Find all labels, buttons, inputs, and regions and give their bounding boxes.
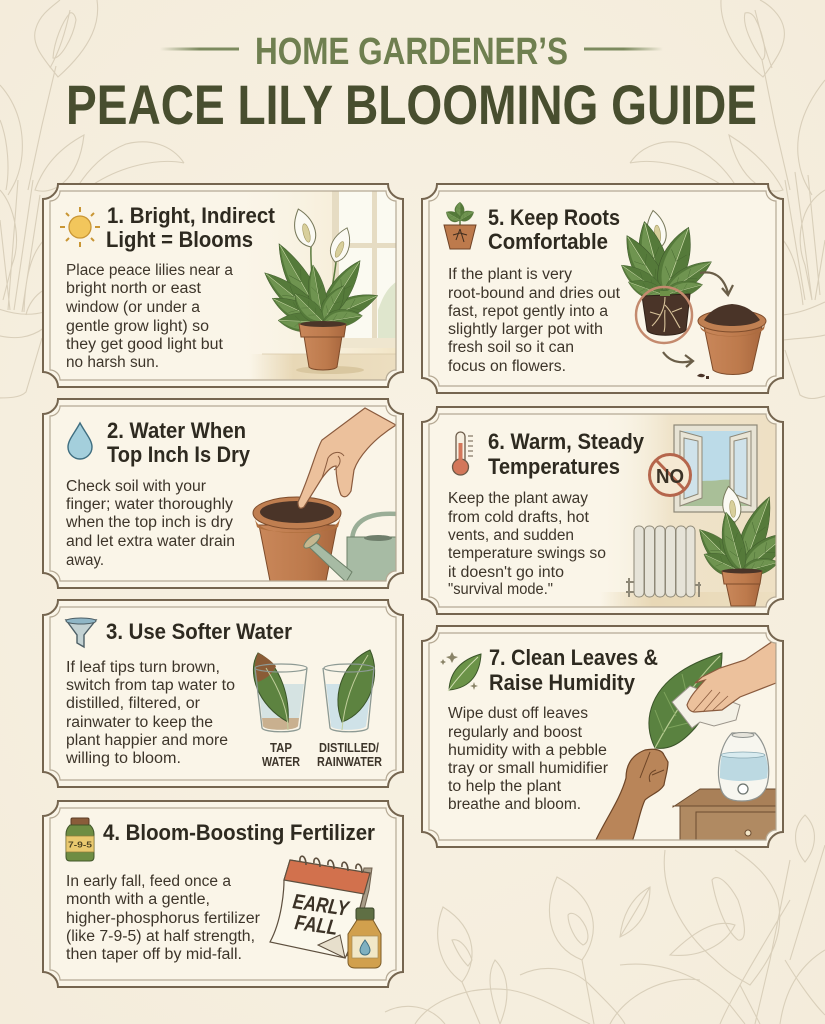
icon: fertilizer bottle: 7-9-5 xyxy=(68,840,92,850)
soil crumbs xyxy=(697,374,709,379)
body text 6: vents, and sudden xyxy=(448,527,574,544)
body text 6: it doesn't go into xyxy=(448,564,564,581)
icon: fertilizer bottle xyxy=(66,818,94,861)
illustration: early fall calendar: FALL xyxy=(293,911,339,940)
icon: funnel xyxy=(66,618,96,647)
body text 3: plant happier and more xyxy=(66,732,228,749)
heading 1: 1. Bright, Indirect xyxy=(107,203,276,228)
illustration: distilled water glass xyxy=(323,650,375,732)
body text 2: when the top inch is dry xyxy=(65,514,233,531)
body text 2: Check soil with your xyxy=(66,478,206,495)
heading 5: 5. Keep Roots xyxy=(488,205,620,230)
panel 5: keep roots comfortable xyxy=(422,184,783,393)
body text 5: fresh soil so it can xyxy=(448,339,574,356)
body text 7 xyxy=(448,705,608,813)
heading 7 xyxy=(489,645,658,695)
body text 1: no harsh sun. xyxy=(66,354,159,371)
title: HOME GARDENER’S xyxy=(255,31,568,73)
panel 1: bright indirect light xyxy=(43,184,403,387)
body text 6 xyxy=(448,490,606,598)
body text 7: regularly and boost xyxy=(448,724,583,741)
body text 6: "survival mode." xyxy=(448,581,553,598)
heading 2: Top Inch Is Dry xyxy=(107,442,251,467)
body text 7: humidity with a pebble xyxy=(448,742,607,759)
icon: water drop xyxy=(68,423,92,459)
body text 2: and let extra water drain xyxy=(66,533,235,550)
no sign xyxy=(650,454,690,496)
body text 5: If the plant is very xyxy=(448,266,572,283)
heading 7: 7. Clean Leaves & xyxy=(489,645,658,670)
body text 7: tray or small humidifier xyxy=(448,760,608,777)
panel 2: water when top inch is dry xyxy=(43,399,403,588)
body text 4 xyxy=(66,873,260,963)
body text 3 xyxy=(65,659,235,767)
body text 4: higher-phosphorus fertilizer xyxy=(66,910,260,927)
body text 7: breathe and bloom. xyxy=(448,796,581,813)
glass labels: TAP xyxy=(270,741,292,755)
icon: potted seedling with roots xyxy=(443,202,476,249)
body text 4: then taper off by mid-fall. xyxy=(66,946,242,963)
heading 7: Raise Humidity xyxy=(489,670,636,695)
body text 4: In early fall, feed once a xyxy=(66,873,231,890)
heading 5: Comfortable xyxy=(488,229,608,254)
illustration: new pot with soil xyxy=(698,304,766,374)
panel 4: bloom-boosting fertilizer xyxy=(43,801,403,987)
arrow: soil direction xyxy=(663,352,693,367)
body text 3: distilled, filtered, or xyxy=(66,695,200,712)
body text 7: to help the plant xyxy=(448,778,562,795)
heading 1: Light = Blooms xyxy=(106,227,253,252)
heading 5 xyxy=(488,205,620,254)
illustration: dropper bottle xyxy=(348,908,381,968)
illustration: finger testing soil with watering can xyxy=(253,408,398,582)
panel 7: clean leaves and raise humidity xyxy=(422,626,783,847)
illustration: tap water glass xyxy=(253,653,307,732)
icon: sparkling leaf xyxy=(440,652,481,691)
illustration: plant on window sill xyxy=(256,192,396,380)
body text 5: slightly larger pot with xyxy=(448,321,603,338)
heading 2 xyxy=(107,418,251,467)
illustration: plant with root ball xyxy=(615,209,716,343)
body text 3: switch from tap water to xyxy=(66,677,235,694)
body text 1: they get good light but xyxy=(66,336,224,353)
body text 4: (like 7-9-5) at half strength, xyxy=(66,928,255,945)
body text 5: focus on flowers. xyxy=(448,358,566,375)
arrow: repot direction xyxy=(700,272,733,295)
body text 6: Keep the plant away xyxy=(448,490,588,507)
body text 1: window (or under a xyxy=(65,299,200,316)
body text 1: Place peace lilies near a xyxy=(66,262,233,279)
illustration: early fall calendar: EARLY xyxy=(291,890,352,921)
body text 3: If leaf tips turn brown, xyxy=(66,659,220,676)
illustration: window, radiator and plant xyxy=(608,414,776,606)
heading 6: 6. Warm, Steady xyxy=(488,429,645,454)
heading 1 xyxy=(106,203,276,252)
icon: sun xyxy=(60,207,100,247)
heading 4: 4. Bloom-Boosting Fertilizer xyxy=(103,820,375,845)
body text 2 xyxy=(65,478,235,569)
body text 5: fast, repot gently into a xyxy=(448,303,608,320)
body text 3: willing to bloom. xyxy=(65,750,181,767)
body text 1: bright north or east xyxy=(66,280,202,297)
body text 2: finger; water thoroughly xyxy=(66,496,233,513)
body text 1: gentle grow light) so xyxy=(66,318,209,335)
body text 6: from cold drafts, hot xyxy=(448,509,590,526)
body text 5: root-bound and dries out xyxy=(448,285,621,302)
panel 3: use softer water xyxy=(43,600,403,787)
glass labels xyxy=(262,741,382,769)
body text 4: month with a gentle, xyxy=(66,891,210,908)
no sign: NO xyxy=(656,466,684,488)
illustration: early fall calendar xyxy=(270,856,372,958)
icon: thermometer xyxy=(452,432,473,475)
body text 5 xyxy=(448,266,621,375)
illustration: hands wiping leaf and humidifier xyxy=(595,639,776,846)
glass labels: RAINWATER xyxy=(317,755,382,769)
title xyxy=(66,31,757,136)
heading 3: 3. Use Softer Water xyxy=(106,619,292,644)
panel 6: warm steady temperatures xyxy=(422,407,794,614)
heading 2: 2. Water When xyxy=(107,418,246,443)
body text 2: away. xyxy=(66,552,104,569)
body text 6: temperature swings so xyxy=(448,545,606,562)
heading 6 xyxy=(488,429,645,479)
body text 3: rainwater to keep the xyxy=(66,714,213,731)
body text 7: Wipe dust off leaves xyxy=(448,705,588,722)
body text 1 xyxy=(65,262,233,371)
glass labels: DISTILLED/ xyxy=(319,741,379,755)
glass labels: WATER xyxy=(262,755,300,769)
heading 6: Temperatures xyxy=(488,454,620,479)
